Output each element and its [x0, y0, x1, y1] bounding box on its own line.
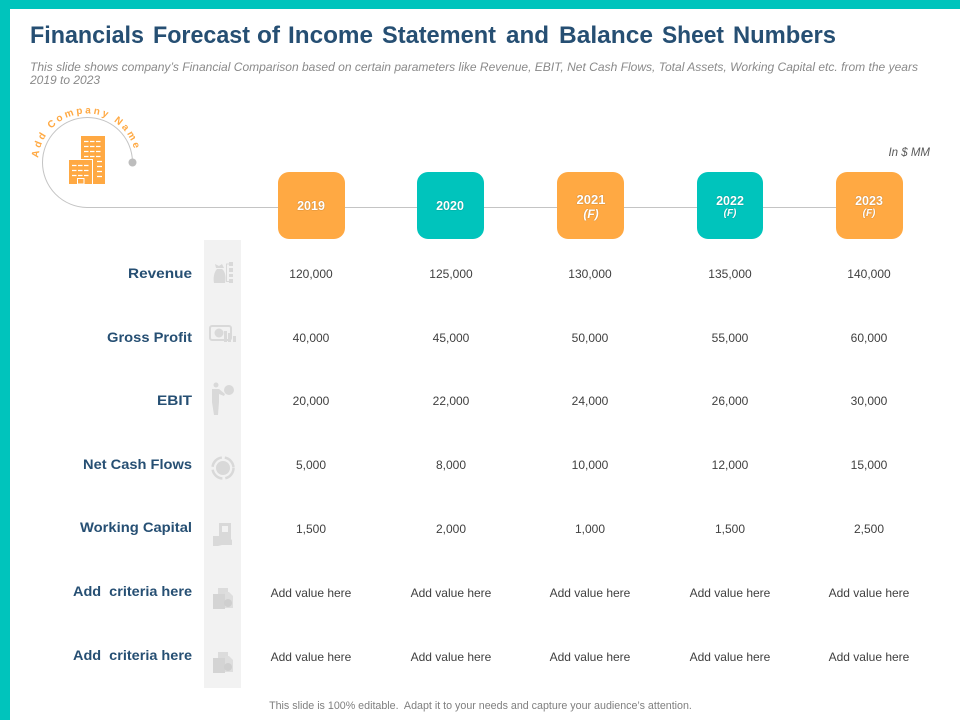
- timeline end dot: [128, 158, 136, 166]
- year badge 2021: [557, 172, 624, 239]
- year badge 2020: [417, 172, 484, 239]
- row: Working Capital: 1,000: [575, 522, 605, 536]
- row: EBIT: 22,000: [433, 394, 470, 408]
- company name curved text: Add Company Name: [32, 108, 138, 158]
- row: Revenue: 125,000: [429, 267, 473, 281]
- row: Add criteria 1: Add value here: [271, 586, 352, 600]
- row: Working Capital: 1,500: [715, 522, 745, 536]
- row: Revenue: 130,000: [568, 267, 612, 281]
- row: Add criteria 2: [73, 647, 910, 664]
- title: Forecast: [153, 22, 250, 49]
- row: Add criteria 1: Add value here: [829, 586, 910, 600]
- row: Add criteria 2: Add value here: [271, 650, 352, 664]
- year badge 2023: [836, 172, 903, 239]
- description: 2019 to 2023: [29, 73, 100, 87]
- row: Working Capital: [80, 519, 884, 536]
- title: [30, 22, 836, 49]
- title: of: [257, 22, 281, 49]
- row: EBIT: EBIT: [157, 392, 192, 408]
- row: Revenue: Revenue: [128, 265, 192, 281]
- row: Revenue: [128, 265, 891, 281]
- row: Working Capital: Working Capital: [80, 519, 192, 535]
- row: Net Cash Flows: Net Cash Flows: [83, 456, 192, 472]
- row: EBIT: 24,000: [572, 394, 609, 408]
- year badge 2023: (F): [863, 208, 876, 219]
- row: Net Cash Flows: 8,000: [436, 458, 466, 472]
- row: EBIT: [157, 392, 888, 408]
- year badge 2022: (F): [724, 208, 737, 219]
- row: Revenue: 120,000: [289, 267, 333, 281]
- row: Net Cash Flows: [83, 456, 888, 472]
- icon column background: [204, 240, 241, 688]
- row: Add criteria 2: Add criteria here: [73, 647, 192, 663]
- year badge 2022: [697, 172, 763, 239]
- row: Net Cash Flows: 15,000: [851, 458, 888, 472]
- row: EBIT: 26,000: [712, 394, 749, 408]
- row: Gross Profit: 40,000: [293, 331, 330, 345]
- year badge 2022: 2022: [716, 194, 744, 208]
- title: Balance: [559, 22, 653, 49]
- year badge 2019: 2019: [297, 199, 325, 213]
- row: Revenue: 140,000: [847, 267, 891, 281]
- row: Gross Profit: 45,000: [433, 331, 470, 345]
- footer note: This slide is 100% editable. Adapt it to your needs and capture your audience’s attention.: [269, 700, 692, 712]
- row: Gross Profit: 50,000: [572, 331, 609, 345]
- year badge 2020: 2020: [436, 199, 464, 213]
- title: Income: [288, 22, 373, 49]
- timeline line: [43, 118, 870, 208]
- row: Add criteria 2: Add value here: [550, 650, 631, 664]
- icon: office buildings: [68, 136, 105, 185]
- icon: calculator documents 1: [213, 588, 233, 609]
- title: Statement: [382, 22, 496, 49]
- row: Working Capital: 2,000: [436, 522, 466, 536]
- row: Add criteria 2: Add value here: [690, 650, 771, 664]
- description: This slide shows company’s Financial Comparison based on certain parameters like Revenue, EBIT, Net Cash Flows, Total Assets, Working Capital etc. from the years: [30, 60, 918, 74]
- row: Add criteria 1: Add value here: [690, 586, 771, 600]
- icon: calculator documents 2: [213, 652, 233, 673]
- row: Gross Profit: 55,000: [712, 331, 749, 345]
- row: Gross Profit: [107, 329, 888, 345]
- icon: net cash flows circle: [212, 458, 234, 478]
- title: and: [506, 22, 549, 49]
- row: Working Capital: 1,500: [296, 522, 326, 536]
- year badge 2021: 2021: [577, 192, 605, 207]
- row: Add criteria 1: Add value here: [550, 586, 631, 600]
- year badge 2023: 2023: [855, 194, 883, 208]
- icon: revenue money bag: [214, 262, 233, 283]
- row: Net Cash Flows: 10,000: [572, 458, 609, 472]
- row: Add criteria 2: Add value here: [829, 650, 910, 664]
- row: Revenue: 135,000: [708, 267, 752, 281]
- unit note: In $ MM: [888, 147, 930, 159]
- icon: gross profit banknote: [210, 326, 236, 342]
- row: Add criteria 1: [73, 583, 910, 600]
- row: Add criteria 2: Add value here: [411, 650, 492, 664]
- year badge 2021: (F): [583, 207, 599, 221]
- row: Net Cash Flows: 12,000: [712, 458, 749, 472]
- description: [29, 60, 918, 87]
- row: Add criteria 1: Add value here: [411, 586, 492, 600]
- icon: working capital hand with cash: [213, 523, 232, 546]
- row: Gross Profit: 60,000: [851, 331, 888, 345]
- row: Gross Profit: Gross Profit: [107, 329, 192, 345]
- title: Sheet: [662, 22, 724, 49]
- year badge 2019: [278, 172, 345, 239]
- row: Add criteria 1: Add criteria here: [73, 583, 192, 599]
- row: EBIT: 30,000: [851, 394, 888, 408]
- row: Working Capital: 2,500: [854, 522, 884, 536]
- icon: EBIT businessman: [212, 382, 234, 415]
- title: Financials: [30, 22, 144, 49]
- title: Numbers: [733, 22, 836, 49]
- row: EBIT: 20,000: [293, 394, 330, 408]
- row: Net Cash Flows: 5,000: [296, 458, 326, 472]
